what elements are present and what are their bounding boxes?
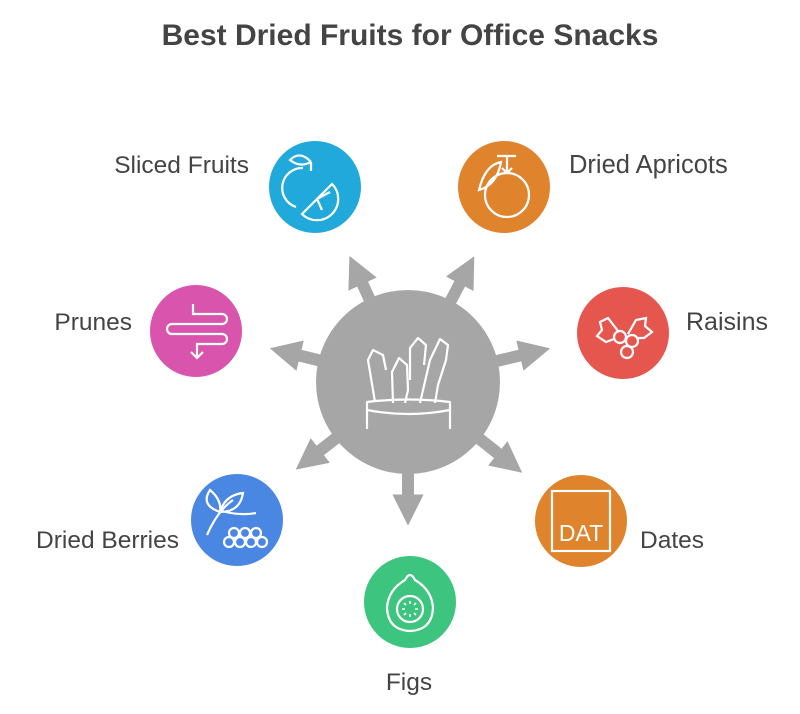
icon: dried fruit cup — [367, 338, 450, 429]
center circle — [316, 290, 500, 474]
label: Raisins: Raisins — [686, 308, 768, 336]
title: Best Dried Fruits for Office Snacks — [162, 19, 658, 52]
label: Dried Berries: Dried Berries — [36, 527, 179, 554]
node: Prunes — [150, 285, 242, 377]
node: Dates: DAT — [559, 520, 603, 546]
arrows — [285, 270, 535, 510]
node: Figs — [364, 556, 456, 648]
node: Raisins — [577, 287, 669, 379]
label: Prunes: Prunes — [54, 309, 132, 336]
node: Dried Berries — [191, 474, 283, 566]
label: Sliced Fruits: Sliced Fruits — [114, 152, 249, 179]
label: Dried Apricots: Dried Apricots — [569, 151, 728, 179]
label: Dates: Dates — [640, 527, 704, 554]
node: Dates — [535, 475, 627, 567]
node: Sliced Fruits — [269, 141, 361, 233]
label: Figs: Figs — [386, 669, 432, 696]
node: Dried Apricots — [458, 141, 550, 233]
